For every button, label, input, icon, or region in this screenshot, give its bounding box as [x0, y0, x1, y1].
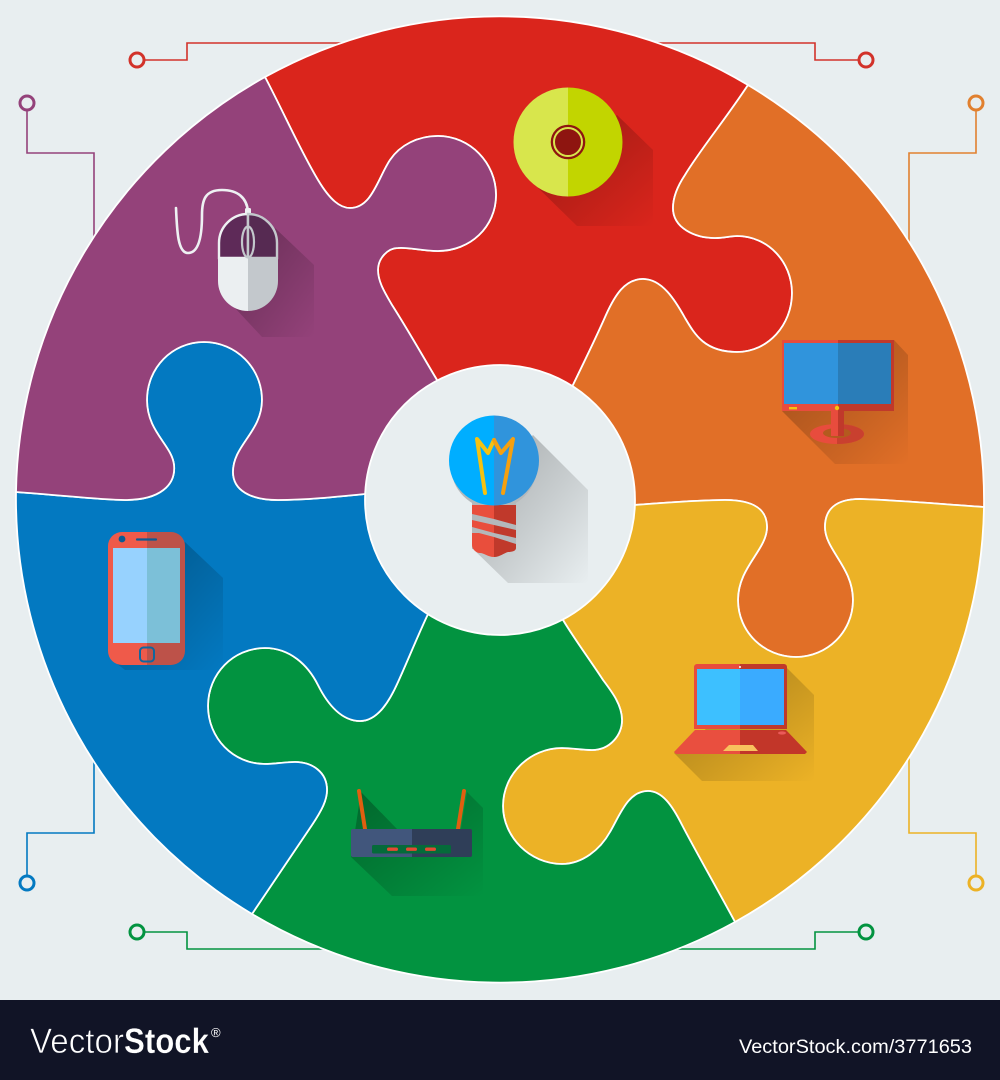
footer id: VectorStock.com/3771653: [739, 1036, 972, 1058]
connector: red left: [130, 43, 345, 67]
panel: orange puzzle piece: [500, 85, 984, 657]
footer logo: Vector: [30, 1022, 124, 1061]
icon: disc: [514, 88, 653, 226]
footer logo: Stock: [124, 1022, 209, 1061]
icon: mouse: [176, 190, 314, 337]
panel: green puzzle piece: [208, 500, 735, 983]
icon: router: [351, 791, 483, 896]
panel: blue puzzle piece: [16, 342, 500, 914]
connector: green left: [130, 925, 330, 949]
panel: purple puzzle piece: [16, 77, 500, 500]
connector: purple: [20, 96, 94, 245]
connector: yellow: [909, 752, 983, 890]
footer logo: ®: [211, 1025, 221, 1040]
icon: light bulb: [449, 416, 588, 583]
panel: yellow puzzle piece: [500, 499, 984, 922]
center circle: [365, 365, 635, 635]
footer bar: [0, 1000, 1000, 1080]
icon: phone: [108, 532, 223, 670]
footer logo: [30, 1022, 221, 1061]
icon: monitor: [782, 340, 908, 464]
connector: orange: [909, 96, 983, 250]
connector: green right: [670, 925, 873, 949]
connector: red right: [655, 43, 873, 67]
icon: laptop: [674, 664, 814, 781]
panel: red puzzle piece: [265, 16, 792, 500]
connector: blue: [20, 760, 94, 890]
